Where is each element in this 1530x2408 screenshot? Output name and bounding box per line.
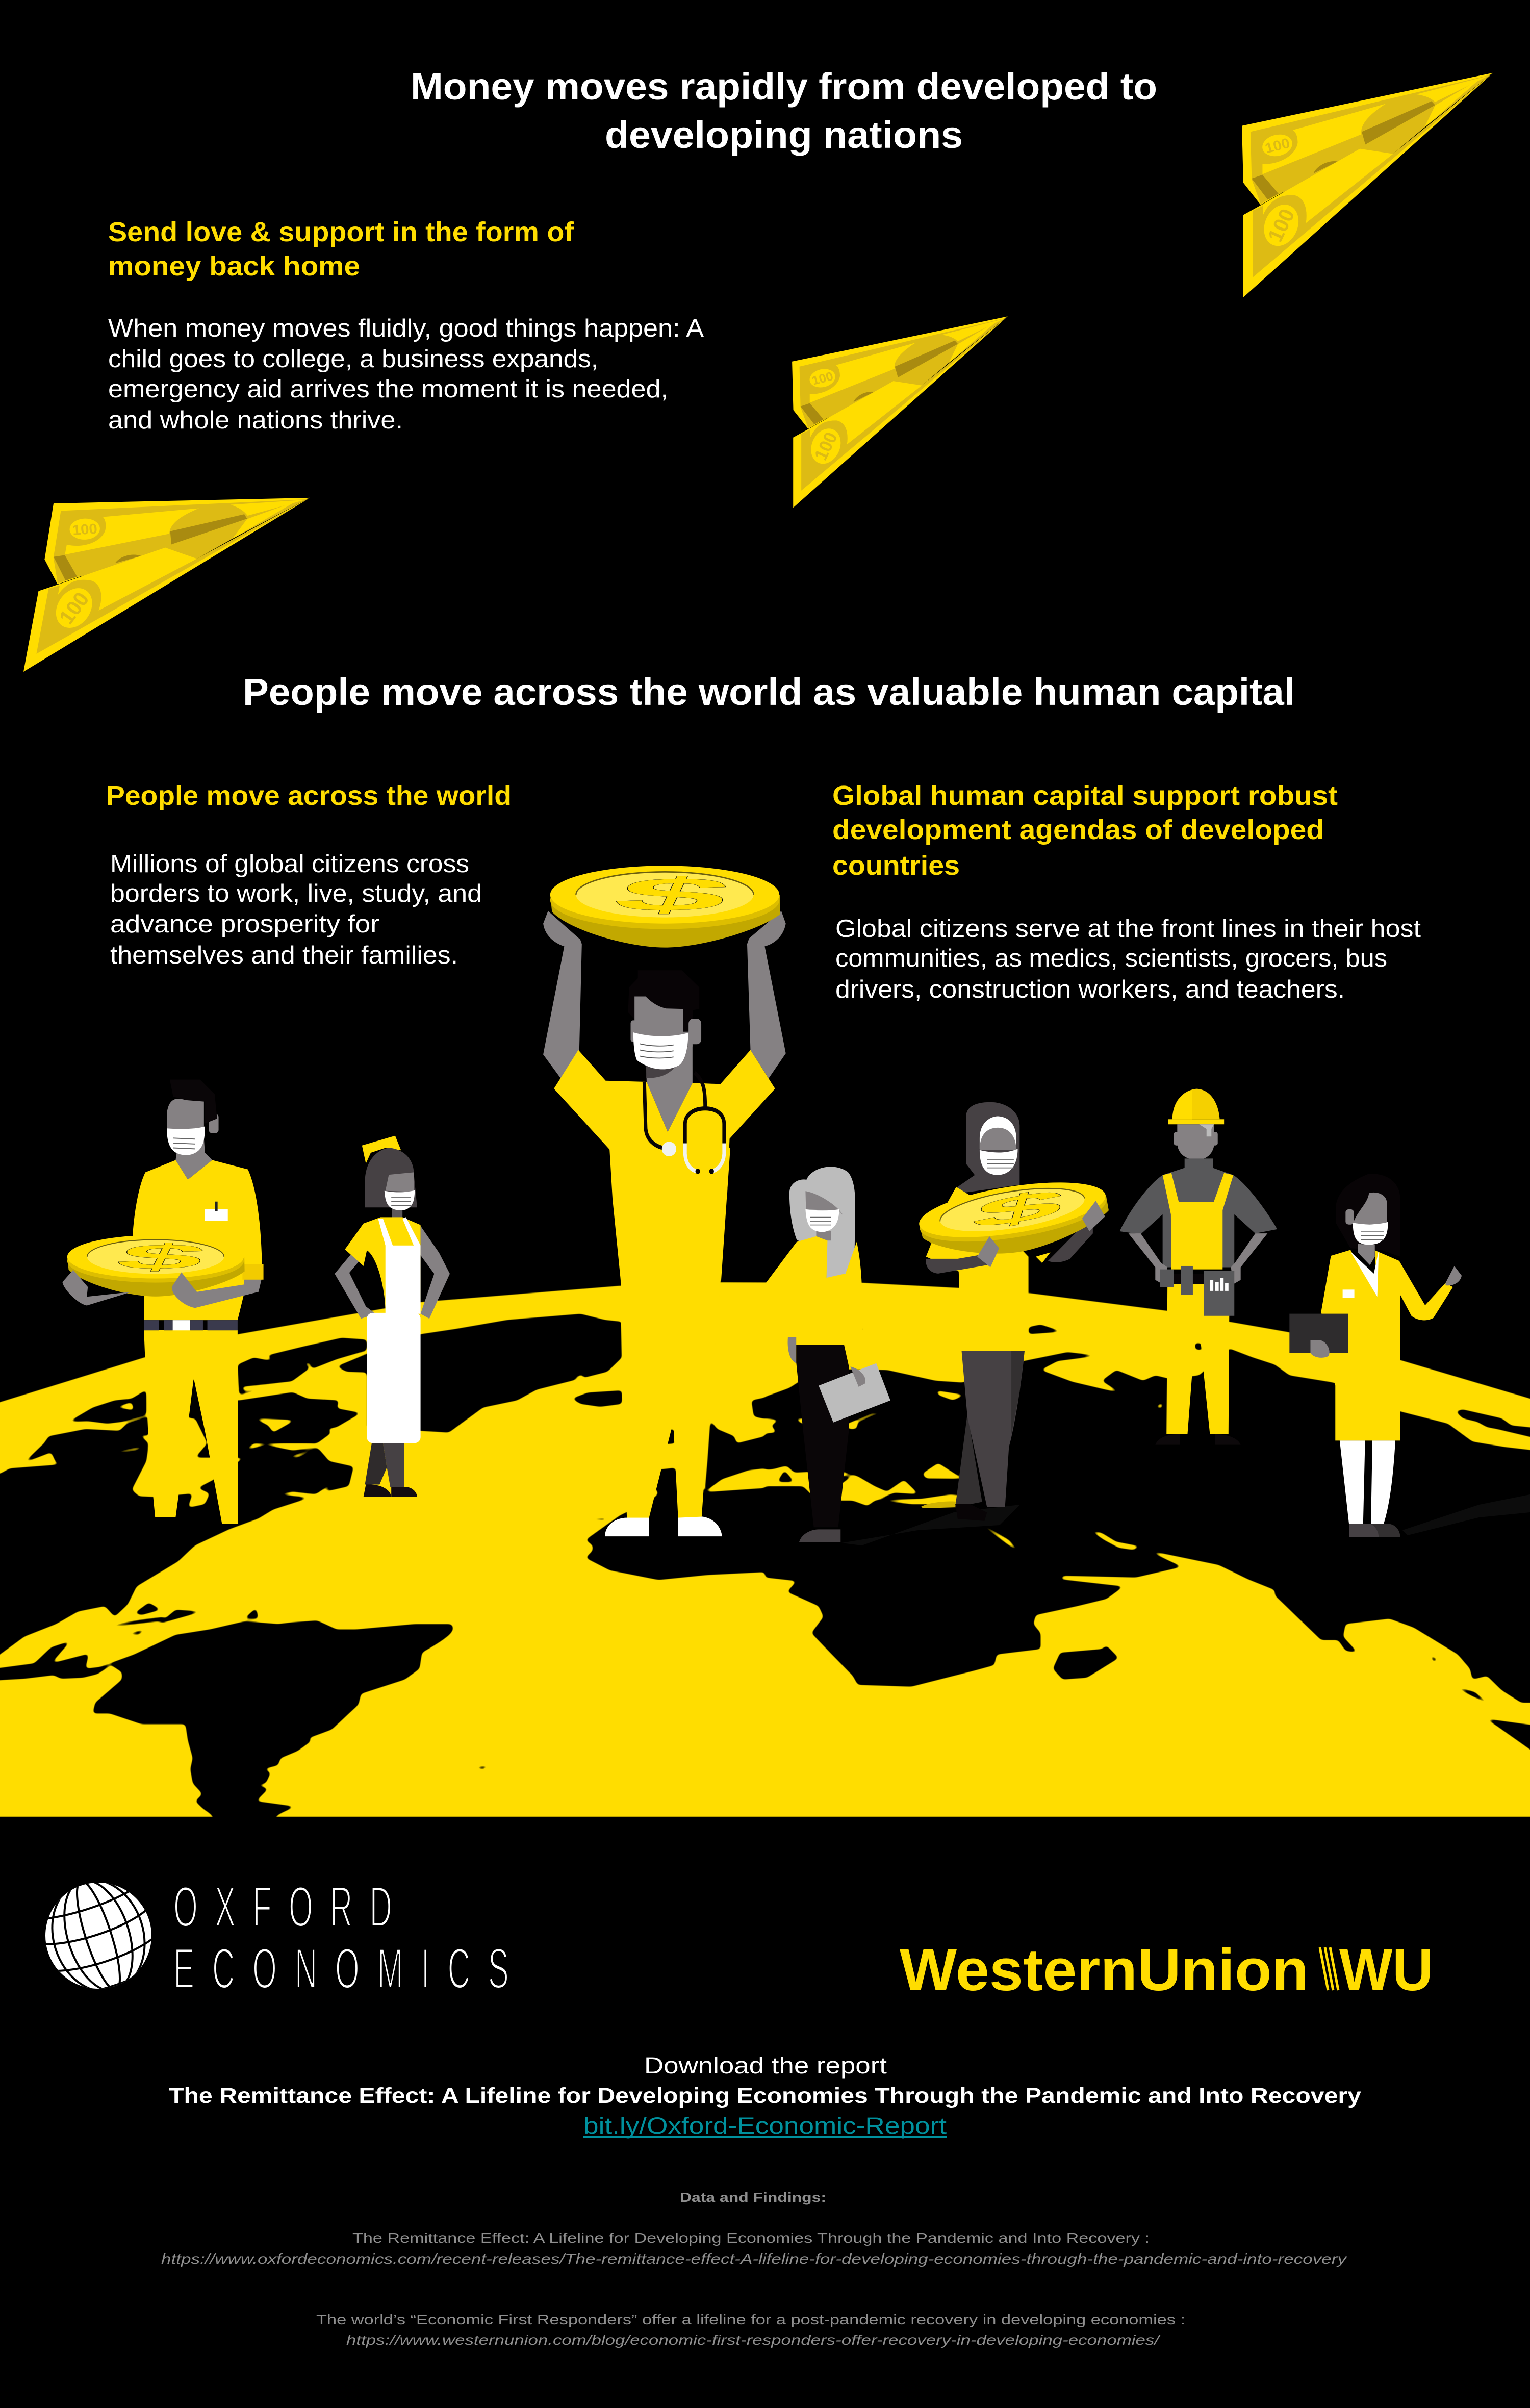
source: remittance effect: https://www.oxfordeconomics.com/recent-releases/The-remittance-effect-A-lifeline-for-developing-economies-through-the-pandemic-and-into-recovery (161, 2251, 1347, 2267)
coin held by woman (915, 1172, 1113, 1266)
text block: millions of global citizens: Millions of global citizens cross (110, 850, 469, 878)
text block: money moves fluidly: emergency aid arrives the moment it is needed, (108, 375, 668, 403)
map left half (0, 1314, 765, 1817)
hair (170, 1080, 217, 1124)
source: economic first responders: https://www.westernunion.com/blog/economic-first-responders-offer-recovery-in-developing-economies/ (346, 2332, 1161, 2348)
face (634, 997, 693, 1047)
scrub top (133, 1160, 262, 1320)
logo: western union: WesternUnion (900, 1937, 1309, 2003)
figure: woman in hijab (926, 1102, 1093, 1521)
mask (980, 1149, 1018, 1175)
hat (362, 1136, 401, 1163)
neck (392, 1209, 402, 1221)
shoes (1370, 1524, 1400, 1537)
face (386, 1172, 414, 1192)
head (1177, 1124, 1214, 1160)
chart pouch (1210, 1278, 1229, 1291)
title: money moves: Money moves rapidly from developed to (411, 65, 1157, 108)
figure: waitress (335, 1136, 450, 1497)
text block: millions of global citizens: advance prosperity for (110, 910, 379, 938)
neck (816, 1231, 831, 1240)
source: remittance effect (161, 2230, 1347, 2267)
hair (789, 1167, 855, 1279)
icon: money plane top right: 100 (1263, 135, 1292, 157)
arms (1129, 1233, 1167, 1284)
coin held by woman: $ (966, 1179, 1071, 1238)
heading: global human capital (832, 780, 1338, 881)
trousers rear leg (955, 1413, 982, 1507)
legs (1340, 1440, 1365, 1524)
lower legs (621, 1275, 721, 1518)
hands of woman (977, 1201, 1105, 1267)
badge (205, 1209, 228, 1221)
hijab (958, 1102, 1019, 1193)
mask (167, 1126, 205, 1155)
shoe (955, 1504, 987, 1521)
legs (144, 1330, 238, 1524)
top (345, 1217, 421, 1314)
figure: man with coin (133, 1080, 264, 1524)
heading: people move across the world: People move across the world (106, 780, 512, 811)
text: report title: The Remittance Effect: A Lifeline for Developing Economies Through the Pandemic and Into Recovery (169, 2084, 1361, 2108)
clipboard (1289, 1314, 1348, 1353)
map right half (765, 1325, 1530, 1775)
icon: money plane left (22, 451, 310, 718)
top (926, 1187, 1029, 1351)
title: money moves (411, 65, 1157, 156)
text block: millions of global citizens: themselves and their families. (110, 942, 458, 969)
collar (1350, 1250, 1379, 1297)
figure: construction worker (1119, 1089, 1277, 1445)
hair (365, 1148, 417, 1207)
mask (805, 1209, 839, 1232)
hand (788, 1337, 796, 1363)
wordmark oxford: OXFORD (173, 1875, 392, 1939)
icon: money plane top right: 100 (1263, 205, 1299, 245)
mask (385, 1190, 415, 1210)
helmet (1172, 1089, 1220, 1119)
head (167, 1099, 212, 1180)
overalls (1163, 1173, 1233, 1270)
hand on clipboard (850, 1366, 865, 1387)
mask (1353, 1222, 1388, 1245)
text block: global citizens serve: drivers, construction workers, and teachers. (835, 976, 1345, 1003)
icon: money plane left: 100 (71, 521, 98, 539)
neck and skin (646, 1044, 693, 1132)
logo: oxford economics (21, 1863, 509, 2010)
heading: send love and support: Send love & support in the form of (108, 217, 574, 247)
figure: doctor holding coin (543, 911, 786, 1536)
legs (1166, 1284, 1230, 1434)
pouches (1160, 1266, 1234, 1316)
source: remittance effect: The Remittance Effect: A Lifeline for Developing Economies Through the Pandemic and Into Recovery : (352, 2230, 1150, 2246)
neck (1358, 1244, 1375, 1265)
text block: millions of global citizens: borders to work, live, study, and (110, 880, 482, 907)
coin held by doctor: $ (604, 869, 742, 921)
arms (543, 911, 582, 1078)
heading: global human capital: development agendas of developed (832, 815, 1324, 845)
belt (1167, 1274, 1207, 1284)
text block: money moves fluidly: child goes to college, a business expands, (108, 345, 598, 373)
text block: global citizens serve: communities, as medics, scientists, grocers, bus (835, 945, 1387, 972)
title: people move: People move across the world as valuable human capital (243, 671, 1295, 713)
coin held by doctor (550, 866, 780, 948)
smoothed map shapes (0, 1282, 1530, 1817)
trousers (962, 1351, 1025, 1507)
raised hand (1445, 1266, 1462, 1285)
globe base (0, 1282, 1530, 1817)
text block: global citizens serve: Global citizens serve at the front lines in their host (835, 915, 1421, 943)
ground shadows (842, 1494, 1530, 1545)
shirt (1119, 1168, 1277, 1267)
face (980, 1128, 1016, 1150)
text block: money moves fluidly: and whole nations thrive. (108, 407, 403, 434)
source: economic first responders: The world’s “Economic First Responders” offer a lifeline for a post-pandemic recovery in developing economies : (316, 2312, 1185, 2327)
shoes (1155, 1434, 1180, 1445)
coin held by man: $ (109, 1237, 215, 1276)
logo: western union: WU (1339, 1937, 1433, 2003)
apron skirt (367, 1313, 421, 1443)
link: report url: bit.ly/Oxford-Economic-Report (583, 2113, 947, 2139)
top (765, 1236, 862, 1345)
text: data and findings: Data and Findings: (680, 2190, 826, 2205)
coin held by man (67, 1235, 245, 1297)
icon: money plane middle (792, 316, 1008, 508)
scrub top (554, 1050, 775, 1199)
world map globe (0, 1282, 1530, 1817)
cap (980, 1116, 1016, 1149)
ear (209, 1114, 219, 1133)
neck (1185, 1158, 1213, 1171)
hair (1336, 1174, 1400, 1257)
shoes (799, 1529, 840, 1542)
clipboard hand (1310, 1340, 1330, 1358)
lower body (609, 1148, 730, 1280)
coat (1321, 1250, 1453, 1440)
shaded patch on continent (921, 1502, 959, 1508)
shoes (364, 1484, 391, 1497)
belt (144, 1320, 238, 1330)
text block: millions of global citizens (110, 850, 482, 969)
source: economic first responders (316, 2312, 1185, 2348)
text block: global citizens serve (835, 915, 1421, 1003)
text: download the report: Download the report (644, 2052, 887, 2079)
upper body and head (543, 911, 786, 1199)
neck shade (646, 1066, 676, 1078)
figure: woman with clipboard (765, 1167, 890, 1542)
mask (633, 1032, 688, 1069)
left arm (926, 1253, 989, 1274)
icon: money plane left: 100 (55, 588, 94, 628)
right arm (1048, 1223, 1093, 1262)
wordmark economics: ECONOMICS (173, 1937, 509, 2001)
figure: woman in lab coat (1289, 1174, 1462, 1537)
apron bib (378, 1217, 421, 1314)
icon: money plane middle: 100 (810, 370, 835, 388)
heading: global human capital: countries (832, 850, 960, 881)
heading: send love and support: money back home (108, 251, 360, 282)
title: money moves: developing nations (605, 114, 963, 156)
face (1353, 1193, 1387, 1224)
icon: money plane middle: 100 (811, 429, 842, 463)
icon: money plane top right (1242, 73, 1493, 297)
heading: send love and support (108, 217, 574, 282)
legs (365, 1443, 387, 1485)
arms (335, 1253, 376, 1319)
text block: money moves fluidly (108, 315, 704, 434)
sleeve and forearm (173, 1277, 262, 1308)
hair (628, 970, 699, 1032)
hands of man (62, 1270, 197, 1306)
ears (688, 1019, 701, 1044)
trousers (796, 1345, 849, 1527)
heading: global human capital: Global human capital support robust (832, 780, 1338, 811)
text block: money moves fluidly: When money moves fluidly, good things happen: A (108, 315, 704, 342)
face (805, 1191, 843, 1215)
stethoscope (644, 1073, 724, 1171)
badge (1343, 1289, 1355, 1298)
shoes (605, 1517, 722, 1536)
icon: globe (45, 1883, 151, 1989)
clipboard (819, 1363, 890, 1423)
